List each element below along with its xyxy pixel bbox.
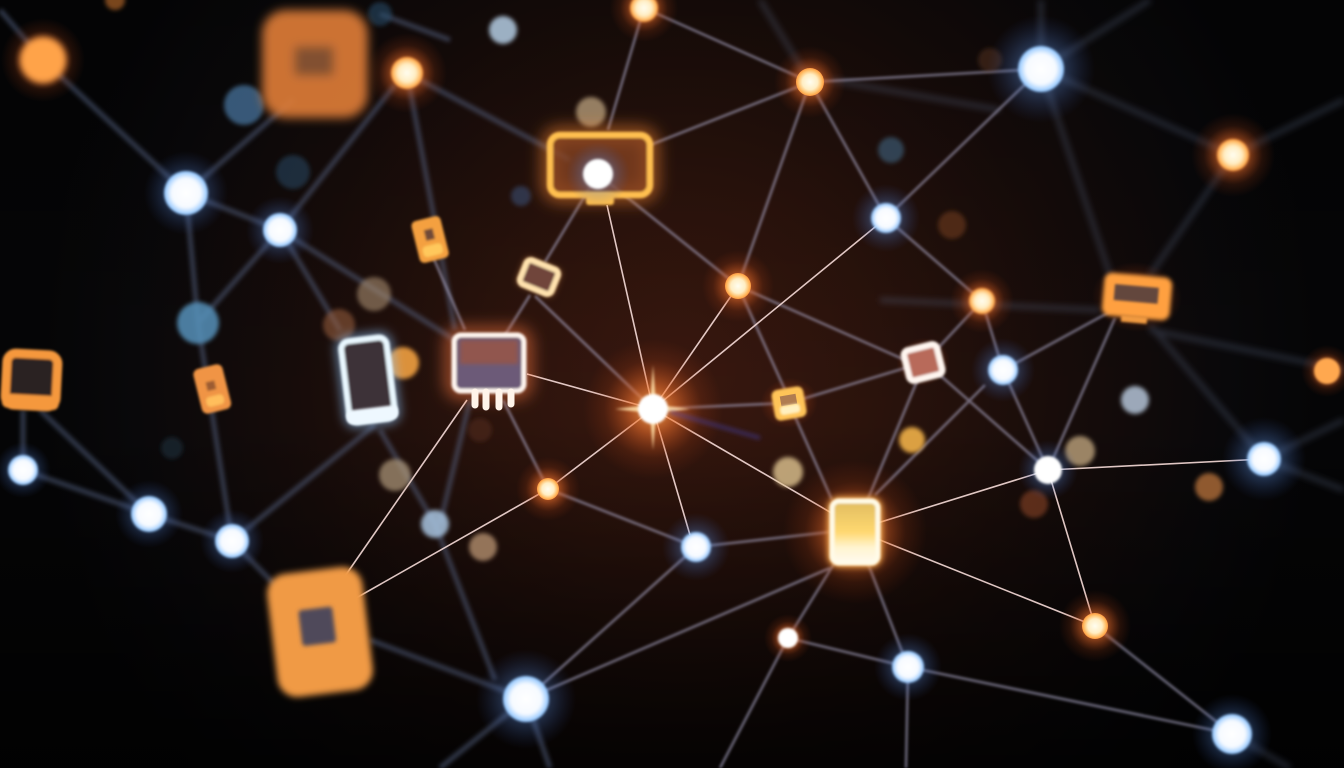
- icon: white phone: [337, 335, 399, 425]
- central hub node: [583, 339, 723, 479]
- icon: left small phone: [192, 363, 232, 415]
- far blurred edges, right: [760, 0, 1344, 768]
- far blurred edges, left: [0, 10, 570, 768]
- icon: large blurred device, top: [262, 10, 368, 118]
- icon: router with pins: [452, 334, 525, 407]
- bokeh dots: dim blue: [161, 2, 1149, 538]
- bokeh dots: warm: [105, 0, 1223, 561]
- icon: bright hub phone: [783, 460, 927, 604]
- icon: left monitor: [2, 353, 61, 410]
- icon: top monitor: [549, 134, 651, 206]
- bright central edges: [325, 205, 1264, 626]
- mid edges: [430, 8, 1232, 768]
- icon: large blurred tablet, bottom: [265, 565, 375, 699]
- icon: small gold device: [756, 373, 822, 433]
- icon: right monitor: [1089, 258, 1185, 336]
- icon: small tilted device: [515, 256, 563, 298]
- lens streak near hub: [670, 412, 760, 438]
- icon: small phone near centre-left: [410, 215, 450, 264]
- icon: small white device: [891, 332, 955, 392]
